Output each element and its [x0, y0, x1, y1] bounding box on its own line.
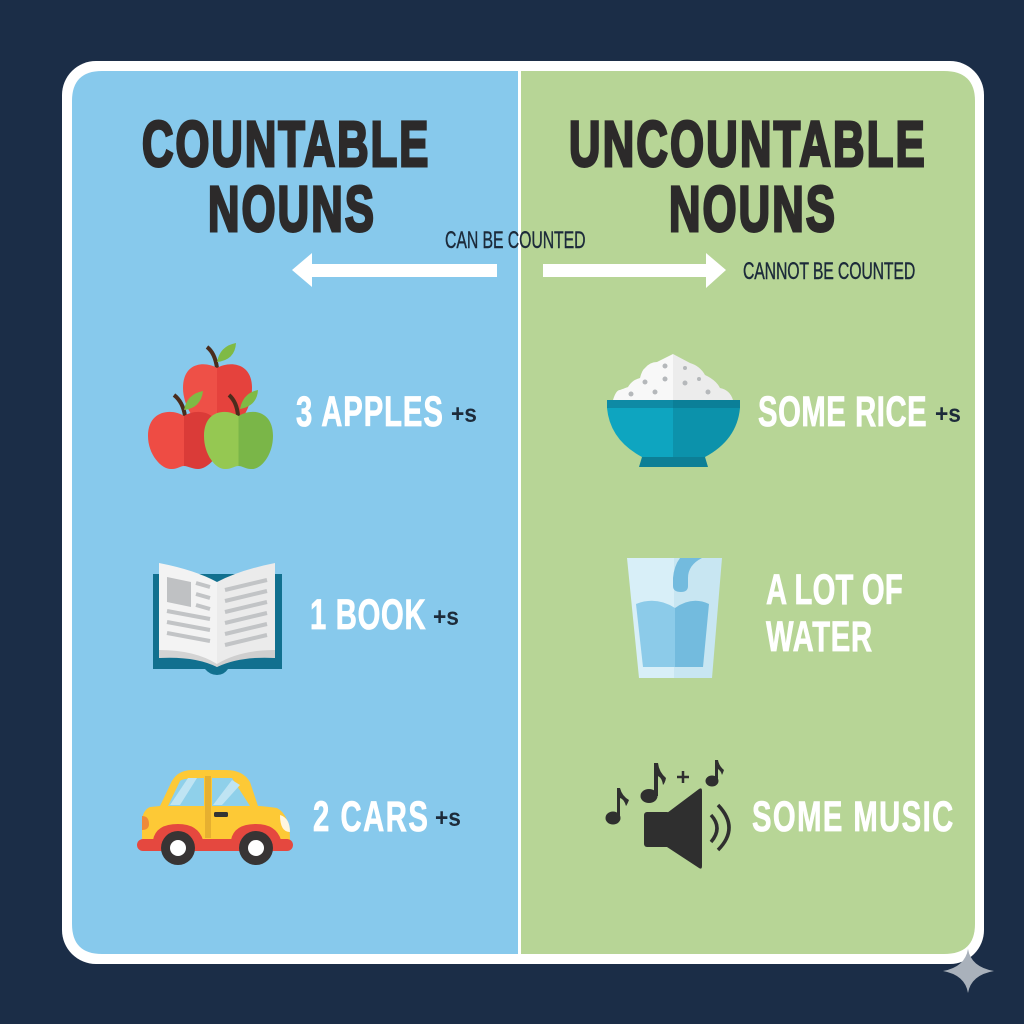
panel: uncountable background	[521, 71, 975, 954]
label: can be counted: CAN BE COUNTED	[445, 228, 586, 254]
icon: glass of water	[627, 558, 722, 678]
text: some music: SOME MUSIC	[752, 792, 953, 840]
text: 3 apples: 3 APPLES	[296, 387, 443, 435]
panel: white frame	[62, 61, 984, 964]
text: 1 book: 1 BOOK	[310, 590, 426, 638]
text: some rice: SOME RICE	[758, 387, 927, 435]
heading: countable nouns	[142, 108, 428, 245]
icon: music speaker	[606, 760, 729, 869]
text: some rice: +s	[935, 400, 961, 428]
heading: countable nouns: COUNTABLE	[142, 108, 428, 180]
panel: countable background	[72, 71, 518, 954]
icon: car	[137, 770, 293, 865]
text: 2 cars: +s	[435, 804, 461, 832]
text: 2 cars: 2 CARS	[313, 792, 428, 840]
label: cannot be counted: CANNOT BE COUNTED	[743, 259, 915, 285]
text: a lot of water: A LOT OF	[766, 565, 903, 613]
text: 3 apples: +s	[451, 400, 477, 428]
icon: rice bowl	[607, 354, 740, 467]
text: 1 book: +s	[433, 603, 459, 631]
icon: book	[153, 563, 282, 675]
heading: uncountable nouns: UNCOUNTABLE	[569, 108, 925, 180]
heading: countable nouns: NOUNS	[208, 173, 374, 245]
text: a lot of water	[766, 565, 903, 660]
heading: uncountable nouns: NOUNS	[669, 173, 835, 245]
icon: sparkle	[943, 949, 994, 993]
text: a lot of water: WATER	[766, 612, 872, 660]
heading: uncountable nouns	[569, 108, 925, 245]
arrow: right	[543, 253, 726, 288]
icon: apples	[148, 343, 273, 469]
arrow: left	[292, 253, 497, 287]
